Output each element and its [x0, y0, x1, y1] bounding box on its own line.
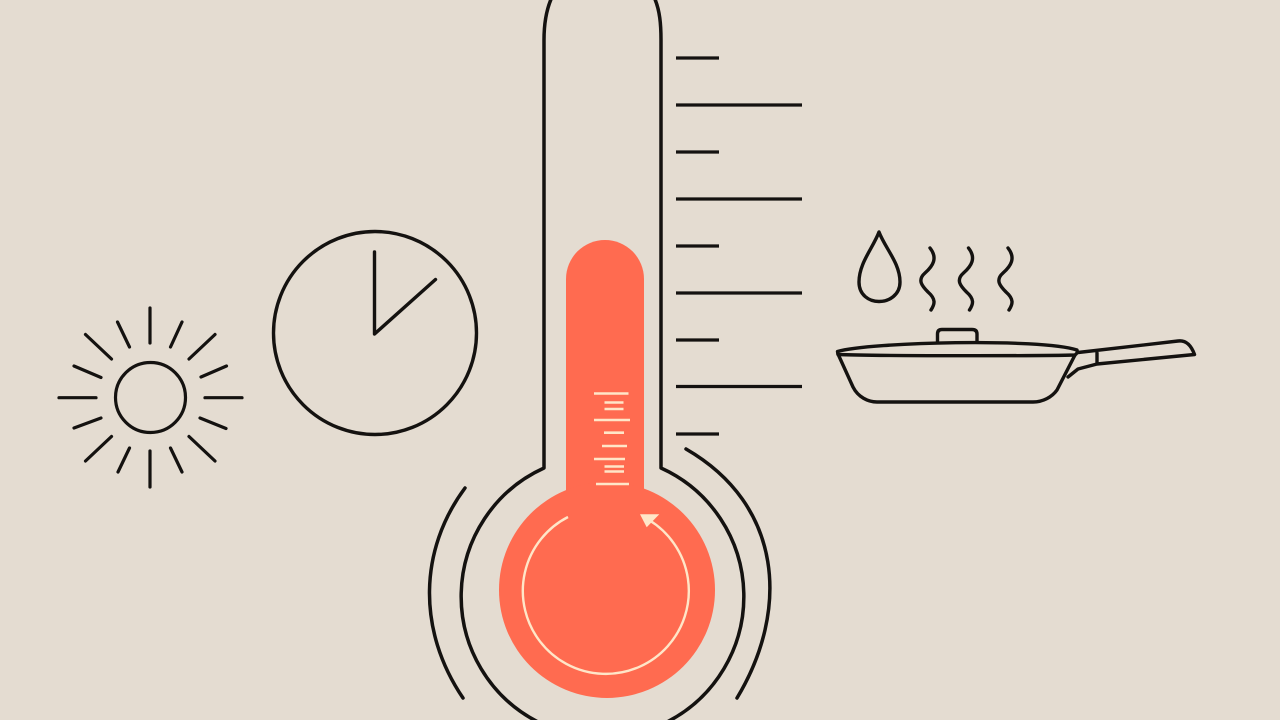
temperature scale ticks — [676, 58, 802, 434]
heat arc: right — [686, 449, 770, 698]
pan handle — [1068, 341, 1194, 377]
heat arc: left — [429, 488, 465, 698]
icon: steam waves — [921, 248, 1012, 310]
icon: water drop — [859, 232, 900, 302]
thermometer red fluid — [499, 240, 715, 698]
pan body — [838, 354, 1075, 402]
icon: sun — [59, 308, 242, 487]
circulation arrow — [523, 514, 689, 674]
icon: thermometer — [461, 0, 744, 720]
pan rim — [838, 343, 1077, 356]
fluid scale marks — [594, 394, 630, 484]
pan lid knob — [938, 330, 977, 342]
icon: clock — [274, 232, 476, 434]
icon: frying pan — [838, 330, 1194, 402]
thermometer outline — [461, 0, 744, 720]
